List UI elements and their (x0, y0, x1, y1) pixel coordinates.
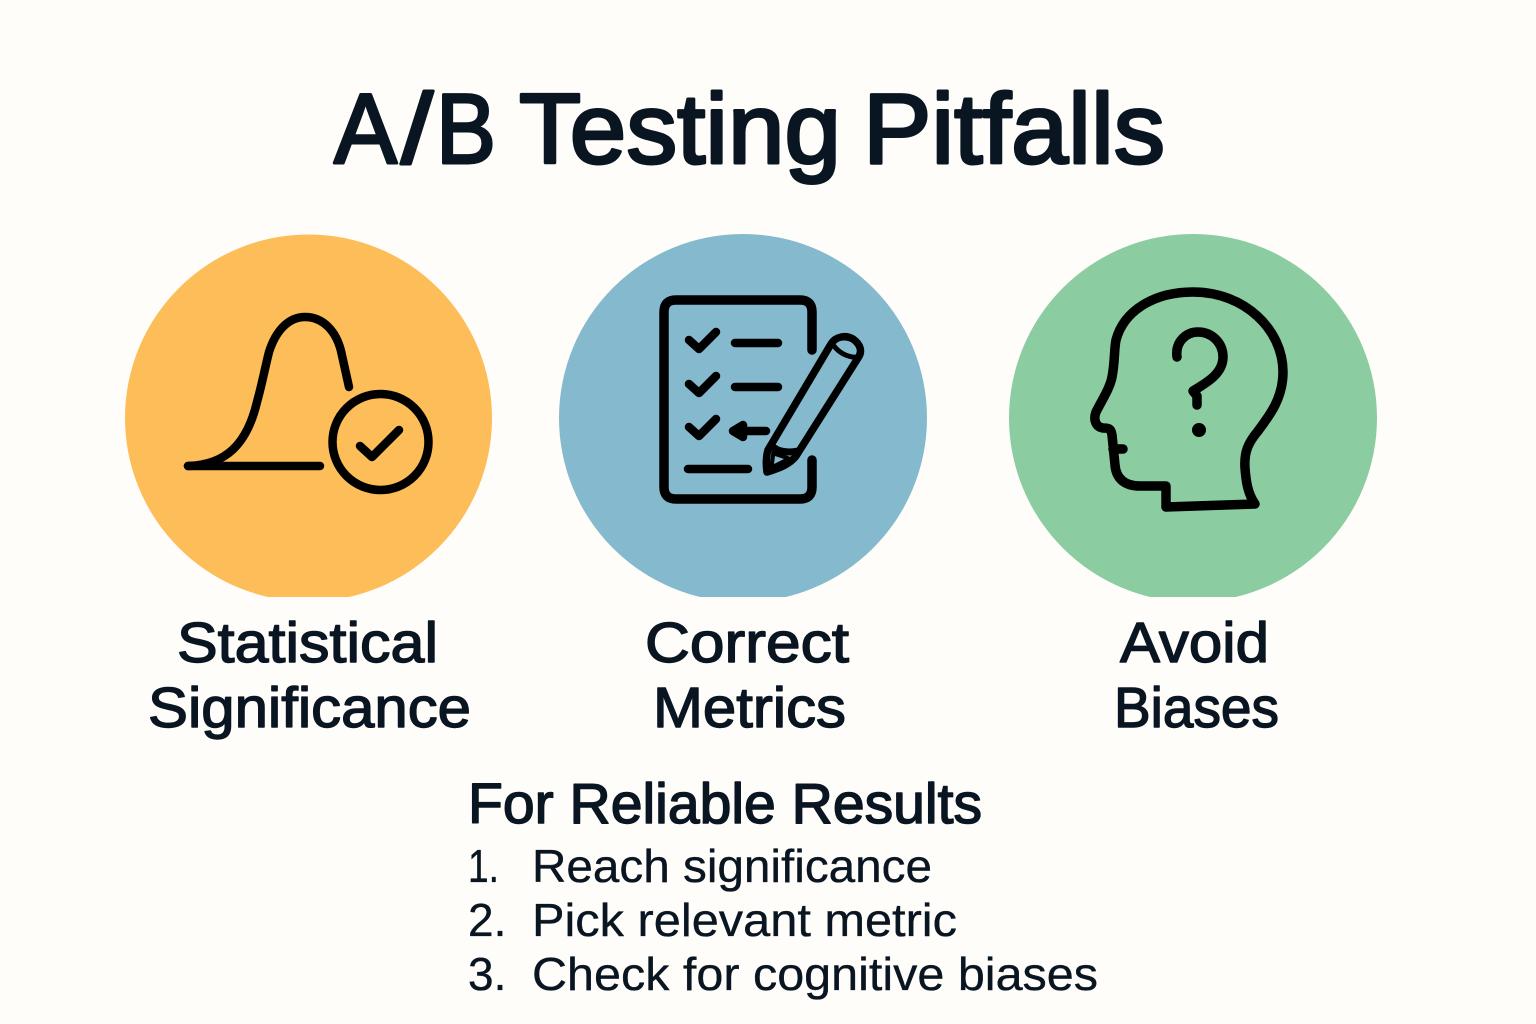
numbered list: 3. (468, 948, 506, 1000)
panel: avoid biases (1009, 234, 1377, 740)
label: correct metrics (645, 611, 849, 740)
label: avoid biases: Avoid (1120, 611, 1269, 675)
title: Pitfalls (863, 73, 1165, 184)
panel: for reliable results (468, 772, 1098, 1000)
label: avoid biases: Biases (1114, 676, 1279, 740)
numbered list: Check for cognitive biases (532, 948, 1098, 1000)
label: statistical significance (148, 611, 471, 740)
title: B (436, 73, 496, 184)
infographic canvas (125, 90, 1377, 1000)
orange circle (125, 234, 492, 602)
label: correct metrics: Correct (645, 611, 849, 675)
numbered list (468, 840, 1098, 1000)
icon: head with question mark (1095, 292, 1283, 507)
panel: statistical significance (125, 234, 492, 740)
numbered list: Pick relevant metric (532, 894, 957, 946)
numbered list: Reach significance (532, 840, 932, 892)
heading: For Reliable Results (468, 772, 982, 836)
icon: checklist with pencil (664, 300, 860, 499)
panel: correct metrics (559, 234, 927, 740)
numbered list: 2. (468, 894, 506, 946)
blue circle (559, 234, 927, 602)
icon: bell curve with check badge (188, 317, 428, 490)
numbered list: 1. (468, 840, 499, 892)
label: avoid biases (1114, 611, 1279, 740)
label: correct metrics: Metrics (653, 676, 846, 740)
title (334, 73, 1165, 184)
title: A (334, 73, 397, 184)
label: statistical significance: Significance (148, 676, 471, 740)
green circle (1009, 234, 1377, 602)
label: statistical significance: Statistical (177, 611, 438, 675)
title: Testing (519, 73, 841, 184)
title: / (401, 73, 434, 184)
